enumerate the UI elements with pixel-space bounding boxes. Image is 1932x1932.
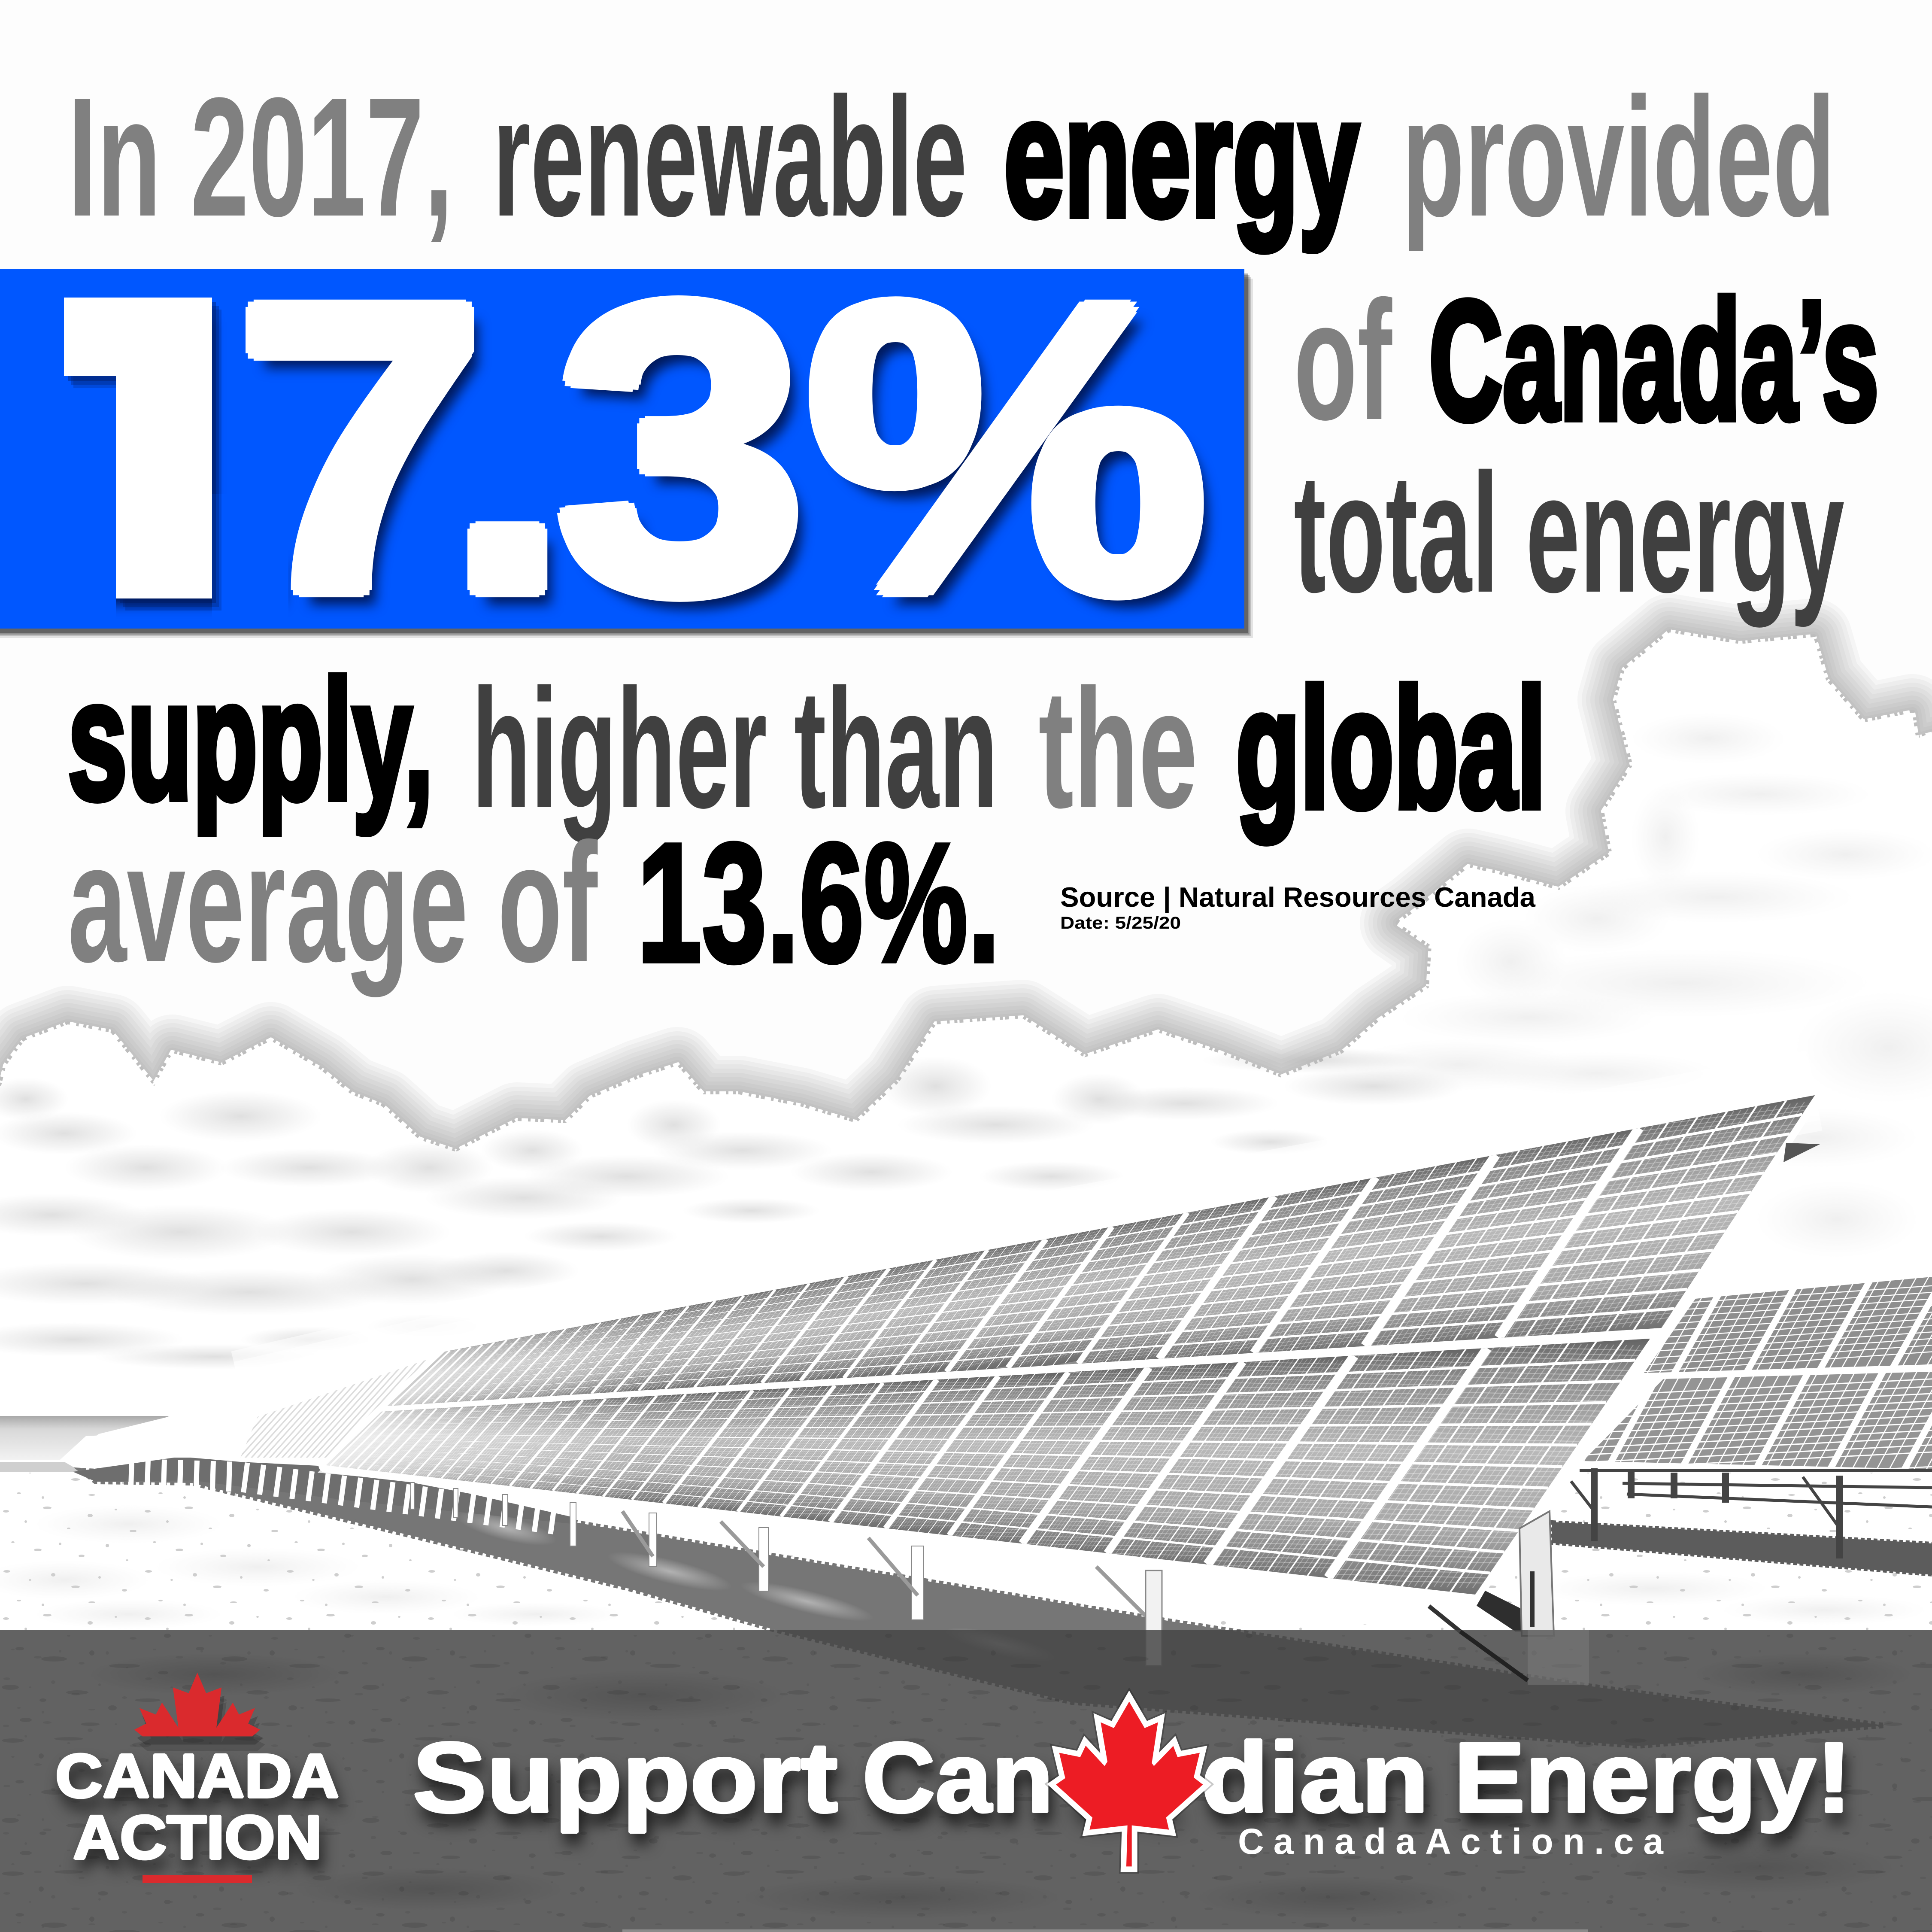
panel: back solar array, top row: [1644, 1277, 1932, 1373]
footer band: [0, 1630, 1932, 1932]
leaf body: [1056, 1701, 1203, 1866]
slogan: Support Canadian Energy!: a: [1065, 1722, 1174, 1833]
slogan: Support Canadian Energy!: Can: [862, 1722, 1053, 1833]
logo: Canada Action: [55, 1673, 339, 1883]
text: renewable: renewable: [493, 62, 967, 252]
headline line 5: [68, 808, 1000, 998]
back array support structure: [1571, 1468, 1932, 1558]
slogan: Support Canadian Energy!: Support: [412, 1722, 838, 1833]
left fade of the panel rows: [318, 1309, 644, 1503]
cloud halo shadow: [0, 632, 1932, 1152]
headline line 4: [68, 645, 1546, 844]
text: 13.6%.: 13.6%.: [637, 808, 1000, 997]
blue highlight box: [0, 269, 1244, 629]
text: of: of: [1294, 265, 1393, 455]
leaf soft shadow: [1056, 1701, 1203, 1866]
distant horizon on the left: [0, 1416, 170, 1460]
shadow of the numeral 1: [68, 302, 221, 611]
sunlit ground between panel and shadow: [326, 1468, 1475, 1627]
headline line 1: [68, 62, 1835, 252]
text: supply,: supply,: [68, 645, 434, 835]
ground: [0, 1468, 1932, 1932]
far left row of posts: [73, 1457, 575, 1524]
bottom image sliver: [622, 1929, 1588, 1932]
flat-topped stem of the numeral 1: [64, 298, 212, 598]
cloud wisps texture: [0, 1048, 1464, 1370]
dark mount under the panel corner: [1477, 1591, 1545, 1631]
white panel frame silhouette: [326, 1095, 1815, 1595]
sunlit patches in the shadow: [454, 1504, 1057, 1668]
logo maple crown: [134, 1673, 260, 1736]
text: energy: energy: [1004, 62, 1360, 252]
text: global: global: [1236, 653, 1546, 844]
text: In 2017,: In 2017,: [68, 62, 453, 252]
logo word CANADA: CANADA: [55, 1741, 339, 1810]
main post seen through the footer band: [1460, 1630, 1589, 1685]
icon: red maple leaf: [1056, 1701, 1203, 1866]
ground speckle: [0, 1473, 1932, 1932]
slogan: Support Canadian Energy!: dian: [1201, 1722, 1429, 1833]
panel: main solar array, lower section: [326, 1330, 1654, 1600]
footer dark blotches: [86, 1653, 1914, 1919]
slogan: Support Canadian Energy!: Energy!: [1454, 1722, 1852, 1833]
clouds: [0, 632, 1932, 1503]
main array shadow on the ground: [82, 1470, 1885, 1746]
post crossing into the footer: [1146, 1571, 1162, 1666]
bright glow above panel edge: [240, 1091, 1815, 1391]
headline line 2 right of box: [1294, 265, 1879, 455]
small dark bracket at top right of array: [1783, 1143, 1820, 1162]
text: higher than: higher than: [472, 653, 998, 844]
website: CanadaAction.ca: CanadaAction.ca: [1238, 1821, 1664, 1862]
panel: back solar array, bottom row: [1583, 1372, 1932, 1469]
white vanishing end of the array: [64, 1352, 445, 1468]
big number 17.3%: 17.3%: [33, 218, 1208, 677]
faint far end of the panel rows: [240, 1359, 429, 1458]
central support post: [1429, 1511, 1554, 1636]
panel: main solar array, upper section: [387, 1090, 1819, 1408]
main array posts and braces: [411, 1482, 1146, 1620]
ground soft blotches: [0, 1505, 1927, 1629]
logo word ACTION: ACTION: [73, 1803, 322, 1872]
text: the: the: [1038, 653, 1198, 843]
logo red bar: [143, 1875, 252, 1883]
big number 17.3%: [64, 295, 1216, 618]
back array ground shadow: [1552, 1522, 1932, 1575]
text: average of: average of: [68, 808, 599, 998]
source citation: Source | Natural Resources Canada: [1060, 881, 1536, 913]
faint cloud wisps at right: [1348, 713, 1932, 1258]
footer ground texture: [0, 1630, 1932, 1932]
blue box drop shadow: [0, 273, 1253, 638]
date: Date: 5/25/20: [1060, 914, 1181, 933]
horizon strip: [0, 1462, 82, 1472]
logo crown shadow: [137, 1681, 265, 1751]
